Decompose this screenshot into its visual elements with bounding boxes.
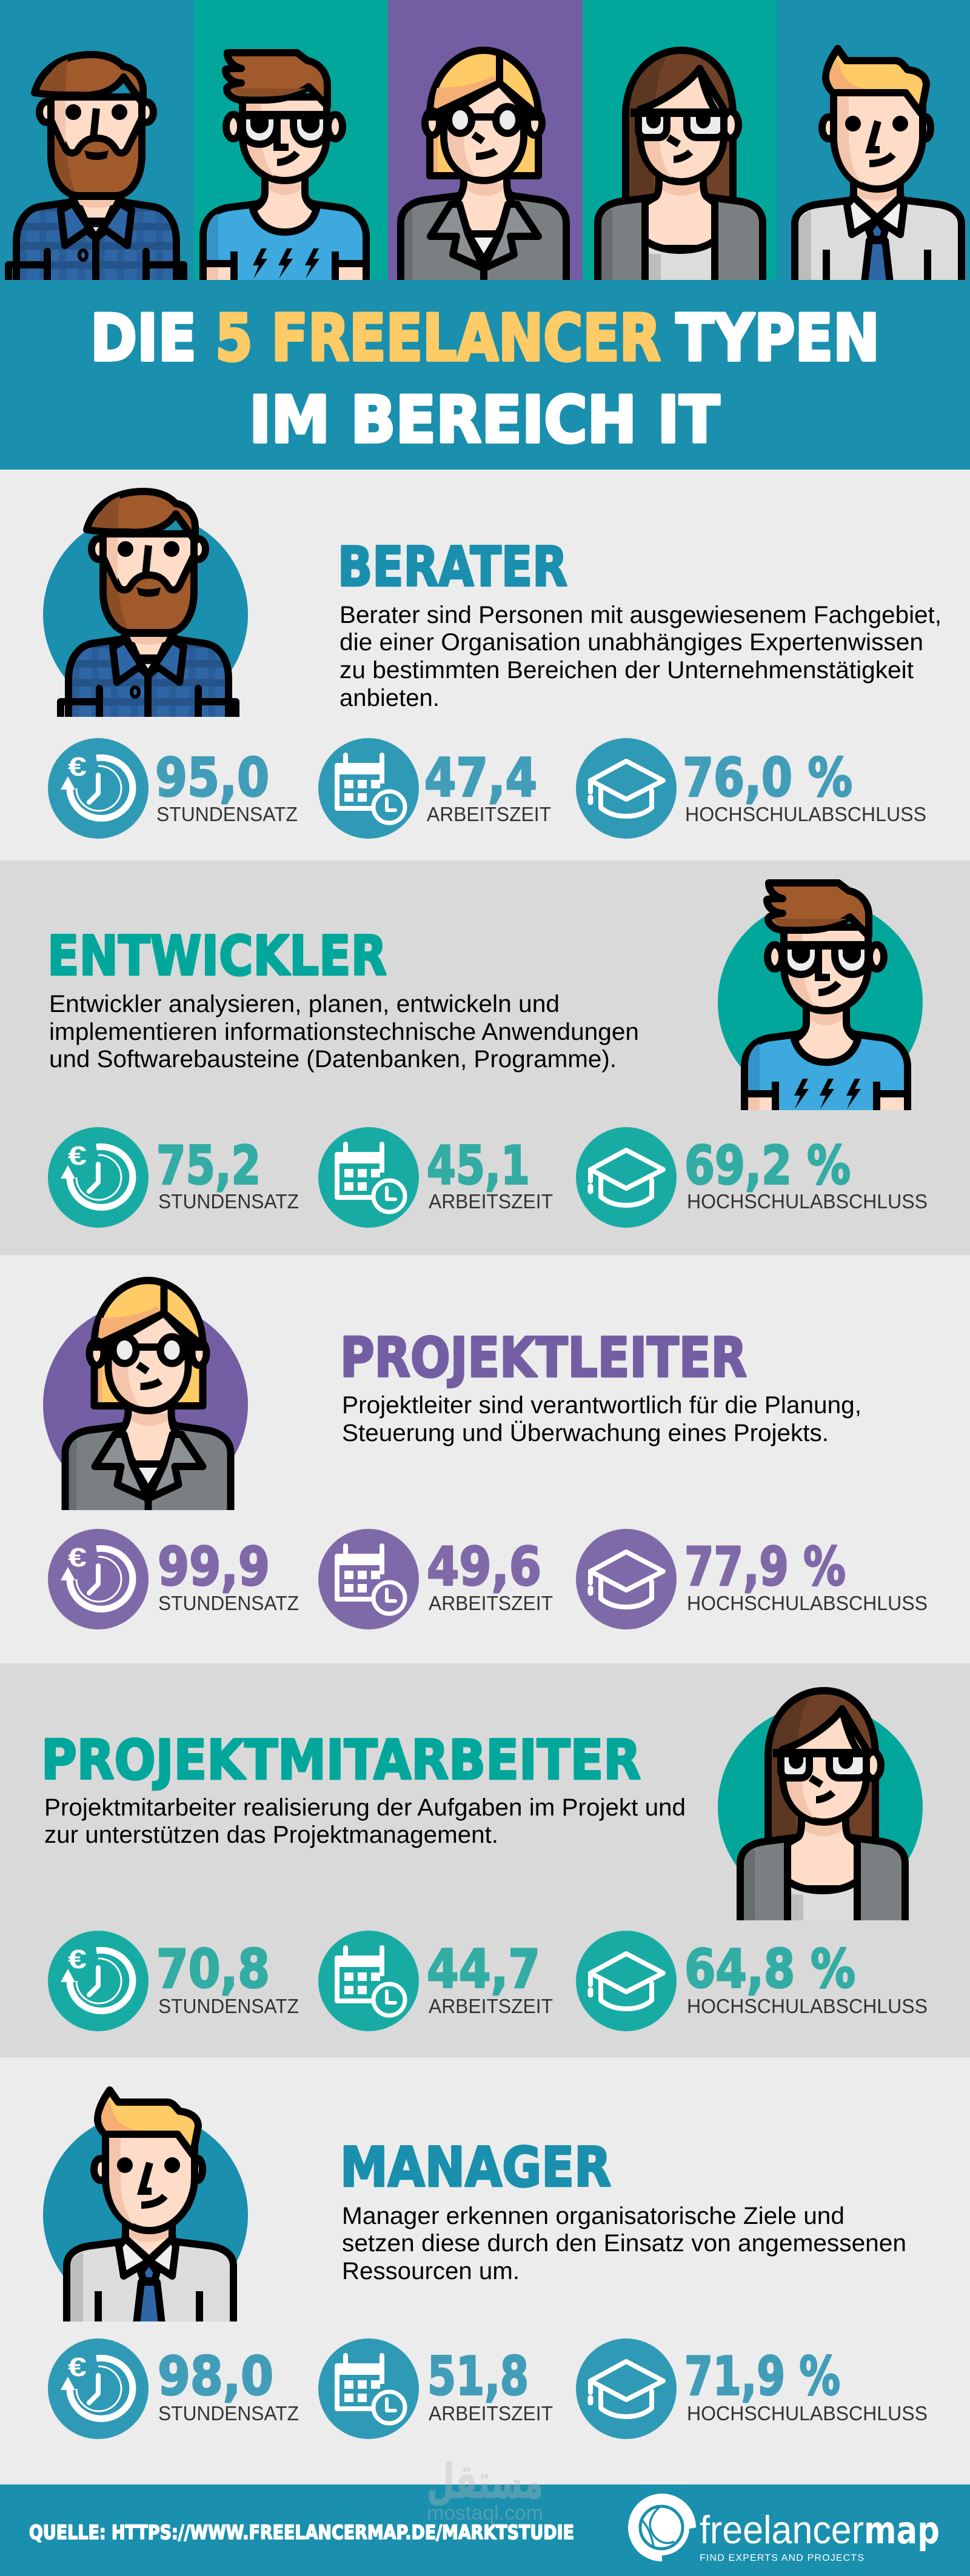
footer band with source: QUELLE: HTTPS://WWW.FREELANCERMAP.DE/MARKTSTUDIE	[29, 2521, 574, 2544]
panel: Entwickler: Entwickler analysieren, planen, entwickeln und	[49, 991, 560, 1017]
panel: Projektleiter: 77,9 %	[684, 1536, 846, 1597]
panel: Entwickler: €	[68, 1141, 87, 1171]
panel: Entwickler: HOCHSCHULABSCHLUSS	[687, 1190, 928, 1213]
panel: Manager	[0, 2057, 970, 2484]
panel: Manager: ARBEITSZEIT	[429, 2402, 553, 2425]
panel: Entwickler: STUNDENSATZ	[158, 1190, 299, 1213]
panel: Berater	[0, 470, 970, 860]
panel: Manager: 98,0	[158, 2345, 273, 2407]
panel: Manager: Ressourcen um.	[342, 2258, 520, 2285]
panel: Manager: €	[68, 2352, 87, 2382]
title banner: 5 FREELANCER	[215, 301, 661, 376]
panel: Projektleiter: Projektleiter sind verantwortlich für die Planung,	[342, 1392, 861, 1419]
panel: Manager: 71,9 %	[684, 2345, 840, 2407]
logo: freelancermap: FIND EXPERTS AND PROJECTS	[700, 2553, 864, 2563]
title banner: DIE	[90, 301, 196, 376]
panel: Projektmitarbeiter: ARBEITSZEIT	[429, 1995, 553, 2017]
panel: Entwickler: ENTWICKLER	[47, 924, 387, 988]
panel: Projektmitarbeiter: HOCHSCHULABSCHLUSS	[687, 1995, 928, 2017]
panel: Projektmitarbeiter: STUNDENSATZ	[158, 1995, 299, 2017]
panel: Berater: ARBEITSZEIT	[427, 803, 551, 825]
panel: Manager: 51,8	[427, 2345, 529, 2407]
panel: Projektmitarbeiter: €	[68, 1945, 87, 1974]
panel: Berater: €	[68, 752, 87, 782]
panel: Manager: MANAGER	[340, 2135, 611, 2199]
panel: Projektleiter: HOCHSCHULABSCHLUSS	[687, 1592, 928, 1614]
panel: Projektmitarbeiter: PROJEKTMITARBEITER	[41, 1728, 641, 1792]
panel: Projektleiter: €	[68, 1543, 87, 1573]
logo: freelancermap: freelancer	[700, 2508, 864, 2552]
panel: Entwickler	[0, 860, 970, 1255]
panel: Berater: 95,0	[155, 747, 269, 808]
panel: Manager: HOCHSCHULABSCHLUSS	[687, 2402, 928, 2425]
panel: Manager: STUNDENSATZ	[158, 2402, 299, 2425]
panel: Entwickler: 69,2 %	[684, 1134, 851, 1196]
watermark: mostaql: mostaql.com	[427, 2501, 543, 2524]
panel: Berater: 47,4	[424, 747, 537, 808]
panel: Projektleiter: 99,9	[158, 1536, 270, 1597]
title banner: TYPEN	[676, 301, 880, 376]
logo: freelancermap	[628, 2494, 940, 2563]
panel: Projektleiter	[0, 1255, 970, 1663]
logo: freelancermap: map	[864, 2508, 940, 2552]
panel: Projektleiter: STUNDENSATZ	[158, 1592, 299, 1614]
panel: Berater: HOCHSCHULABSCHLUSS	[685, 803, 926, 825]
title banner	[0, 280, 970, 470]
panel: Projektmitarbeiter: Projektmitarbeiter realisierung der Aufgaben im Projekt und	[44, 1794, 686, 1821]
panel: Manager: setzen diese durch den Einsatz von angemessenen	[342, 2230, 906, 2257]
panel: Projektmitarbeiter	[0, 1663, 970, 2057]
panel: Berater: Berater sind Personen mit ausgewiesenem Fachgebiet,	[340, 602, 942, 628]
panel: Entwickler: und Softwarebausteine (Datenbanken, Programme).	[49, 1046, 617, 1073]
panel: Berater: STUNDENSATZ	[156, 803, 298, 825]
panel: Projektleiter: 49,6	[427, 1536, 541, 1597]
panel: Berater: BERATER	[338, 535, 567, 599]
panel: Entwickler: implementieren informationstechnische Anwendungen	[49, 1019, 639, 1045]
panel: Projektleiter: PROJEKTLEITER	[340, 1326, 747, 1390]
title banner: IM BEREICH IT	[249, 383, 720, 457]
panel: Berater: 76,0 %	[683, 747, 852, 808]
panel: Entwickler: 45,1	[427, 1134, 530, 1196]
watermark: mostaql	[427, 2455, 543, 2524]
panel: Projektmitarbeiter: zur unterstützen das Projektmanagement.	[44, 1822, 498, 1848]
panel: Projektleiter: ARBEITSZEIT	[429, 1592, 553, 1614]
panel: Projektleiter: Steuerung und Überwachung eines Projekts.	[342, 1420, 829, 1446]
panel: Projektmitarbeiter: 44,7	[427, 1938, 540, 2000]
panel: Entwickler: 75,2	[156, 1134, 261, 1196]
panel: Berater: anbieten.	[340, 685, 440, 711]
footer band with source	[0, 2484, 970, 2576]
panel: Berater: die einer Organisation unabhängiges Expertenwissen	[340, 629, 923, 656]
header: five freelancer portraits	[0, 0, 970, 288]
panel: Projektmitarbeiter: 70,8	[156, 1938, 270, 2000]
panel: Entwickler: ARBEITSZEIT	[429, 1190, 553, 1213]
panel: Projektmitarbeiter: 64,8 %	[684, 1938, 855, 2000]
panel: Manager: Manager erkennen organisatorische Ziele und	[342, 2203, 845, 2229]
panel: Berater: zu bestimmten Bereichen der Unternehmenstätigkeit	[340, 657, 914, 684]
watermark: mostaql: مستقل	[427, 2455, 543, 2509]
